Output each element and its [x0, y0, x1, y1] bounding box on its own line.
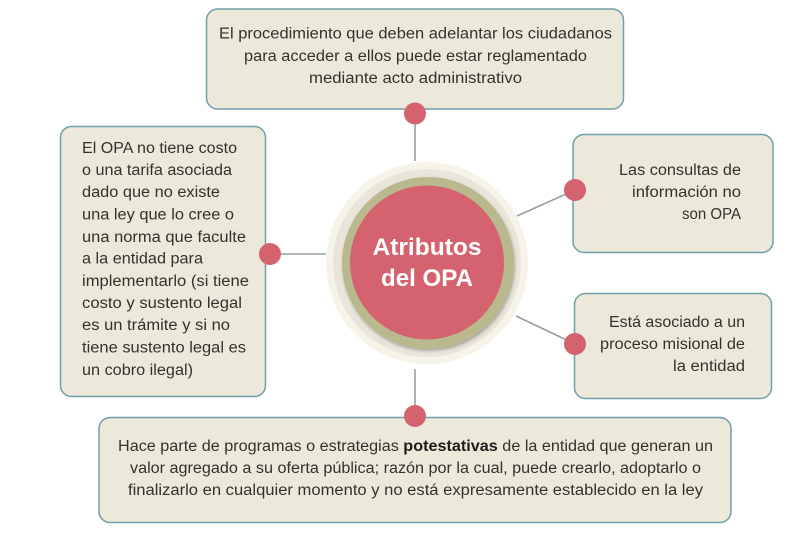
- text: left panel: [82, 140, 249, 379]
- text: left panel: dado que no existe: [82, 184, 220, 201]
- text: bottom panel: Hace parte de programas o estrategias potestativas de la entidad que generan un: [118, 438, 713, 455]
- title: [372, 234, 482, 292]
- text: bottom panel: [118, 438, 713, 499]
- panel: bottom: [99, 418, 731, 522]
- panel: top: [206, 9, 624, 109]
- text: left panel: El OPA no tiene costo: [82, 140, 237, 157]
- connector: lower right: [516, 316, 575, 344]
- text: left panel: es un trámite y si no: [82, 317, 230, 334]
- node dot: upper right: [564, 179, 586, 201]
- text: upper right panel: información no: [632, 184, 741, 201]
- text: top panel: para acceder a ellos puede estar reglamentado: [244, 48, 587, 65]
- connector: left: [270, 253, 326, 255]
- node dot: lower right: [564, 333, 586, 355]
- connector: upper right: [517, 190, 575, 216]
- central circle: Atributos del OPA: [326, 162, 528, 364]
- text: bottom panel: valor agregado a su oferta pública; razón por la cual, puede crearlo, adoptarlo o: [130, 460, 701, 477]
- text: left panel: un cobro ilegal): [82, 362, 193, 379]
- connector: bottom: [414, 369, 416, 416]
- text: lower right panel: la entidad: [673, 358, 745, 375]
- connector: top: [414, 113, 416, 161]
- node dot: top: [404, 102, 426, 124]
- text: left panel: o una tarifa asociada: [82, 162, 232, 179]
- node dot: bottom: [404, 405, 426, 427]
- text: left panel: costo y sustento legal: [82, 295, 242, 312]
- text: lower right panel: [600, 314, 745, 375]
- text: upper right panel: son OPA: [682, 206, 742, 223]
- panel: upper right: [573, 134, 773, 252]
- text: lower right panel: Está asociado a un: [609, 314, 745, 331]
- text: lower right panel: proceso misional de: [600, 336, 745, 353]
- text: left panel: una norma que faculte: [82, 229, 246, 246]
- text: left panel: una ley que lo cree o: [82, 206, 234, 224]
- text: bottom panel: finalizarlo en cualquier momento y no está expresamente establecido en la ley: [128, 482, 703, 499]
- text: top panel: mediante acto administrativo: [309, 70, 522, 87]
- panel: lower right: [574, 294, 772, 398]
- title: del OPA: [381, 265, 473, 292]
- panel: left: [60, 126, 266, 396]
- text: left panel: implementarlo (si tiene: [82, 273, 249, 290]
- text: upper right panel: [619, 162, 742, 223]
- text: top panel: El procedimiento que deben adelantar los ciudadanos: [219, 26, 612, 42]
- title: Atributos: [372, 234, 482, 261]
- text: left panel: tiene sustento legal es: [82, 340, 246, 356]
- text: upper right panel: Las consultas de: [619, 162, 741, 179]
- node dot: left: [259, 243, 281, 265]
- text: left panel: a la entidad para: [82, 250, 203, 268]
- text: top panel: [219, 26, 612, 87]
